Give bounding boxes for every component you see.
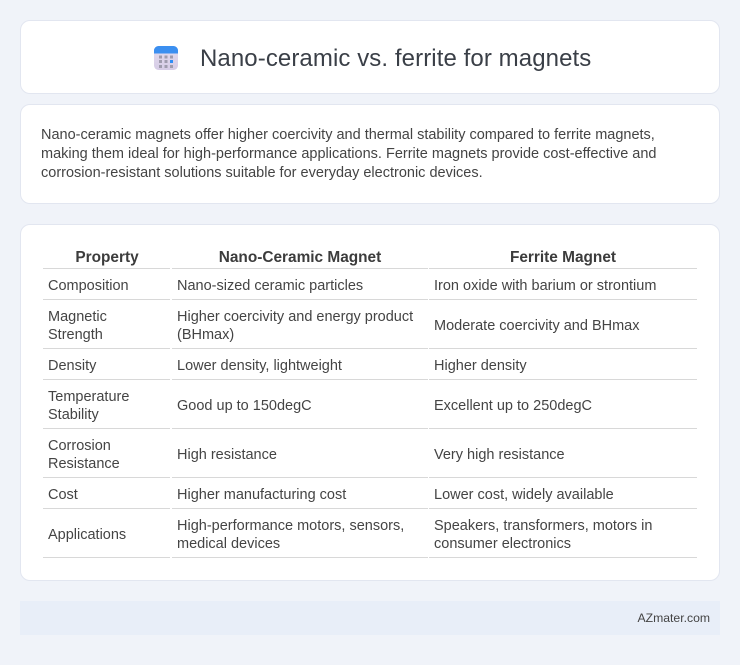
row: density: Higher density: [434, 358, 527, 374]
row: applications: Speakers, transformers, motors in: [434, 518, 652, 534]
row: cost: Cost: [48, 487, 78, 503]
row: composition: [43, 278, 697, 300]
row: magnetic strength: Magnetic: [48, 309, 107, 325]
row: applications: High-performance motors, sensors,: [177, 518, 404, 534]
row: corrosion resistance: Resistance: [48, 456, 120, 472]
row: magnetic strength: Higher coercivity and energy product: [177, 309, 413, 325]
icon: calendar: [154, 46, 178, 70]
row: temperature stability: Good up to 150degC: [177, 398, 312, 414]
row: applications: Applications: [48, 527, 126, 543]
row: density: [43, 358, 697, 380]
row: magnetic strength: (BHmax): [177, 327, 234, 343]
row: magnetic strength: Strength: [48, 327, 103, 343]
row: cost: [43, 487, 697, 509]
intro panel: [20, 104, 720, 204]
row: temperature stability: Excellent up to 250degC: [434, 398, 592, 414]
row: corrosion resistance: High resistance: [177, 447, 277, 463]
row: corrosion resistance: Very high resistance: [434, 447, 565, 463]
row: cost: Lower cost, widely available: [434, 487, 614, 503]
intro text: corrosion-resistant solutions suitable for everyday electronic devices.: [41, 165, 483, 181]
footer bar: [20, 601, 720, 635]
row: magnetic strength: [43, 309, 697, 349]
intro text: [41, 127, 656, 181]
row: applications: [43, 518, 697, 558]
row: temperature stability: [43, 389, 697, 429]
footer credit: AZmater.com: [638, 611, 710, 625]
row: density: Lower density, lightweight: [177, 358, 342, 374]
column headers: Ferrite Magnet: [510, 249, 616, 266]
row: cost: Higher manufacturing cost: [177, 487, 346, 503]
row: applications: consumer electronics: [434, 536, 571, 552]
row: temperature stability: Stability: [48, 407, 99, 423]
row: composition: Nano-sized ceramic particles: [177, 278, 363, 294]
title: Nano-ceramic vs. ferrite for magnets: [200, 45, 591, 72]
row: magnetic strength: Moderate coercivity and BHmax: [434, 318, 640, 334]
row: temperature stability: Temperature: [48, 389, 129, 405]
intro text: making them ideal for high-performance applications. Ferrite magnets provide cost-effective and: [41, 146, 656, 162]
row: composition: Iron oxide with barium or strontium: [434, 278, 656, 294]
row: density: Density: [48, 358, 96, 374]
column headers: Property: [75, 249, 139, 266]
column headers: [43, 249, 697, 269]
row: composition: Composition: [48, 278, 129, 294]
intro text: Nano-ceramic magnets offer higher coercivity and thermal stability compared to ferrite magnets,: [41, 127, 655, 143]
row: corrosion resistance: [43, 438, 697, 478]
comparison table panel: [20, 224, 720, 581]
title panel: [20, 20, 720, 94]
row: corrosion resistance: Corrosion: [48, 438, 111, 454]
row: applications: medical devices: [177, 536, 280, 552]
column headers: Nano-Ceramic Magnet: [219, 249, 381, 266]
